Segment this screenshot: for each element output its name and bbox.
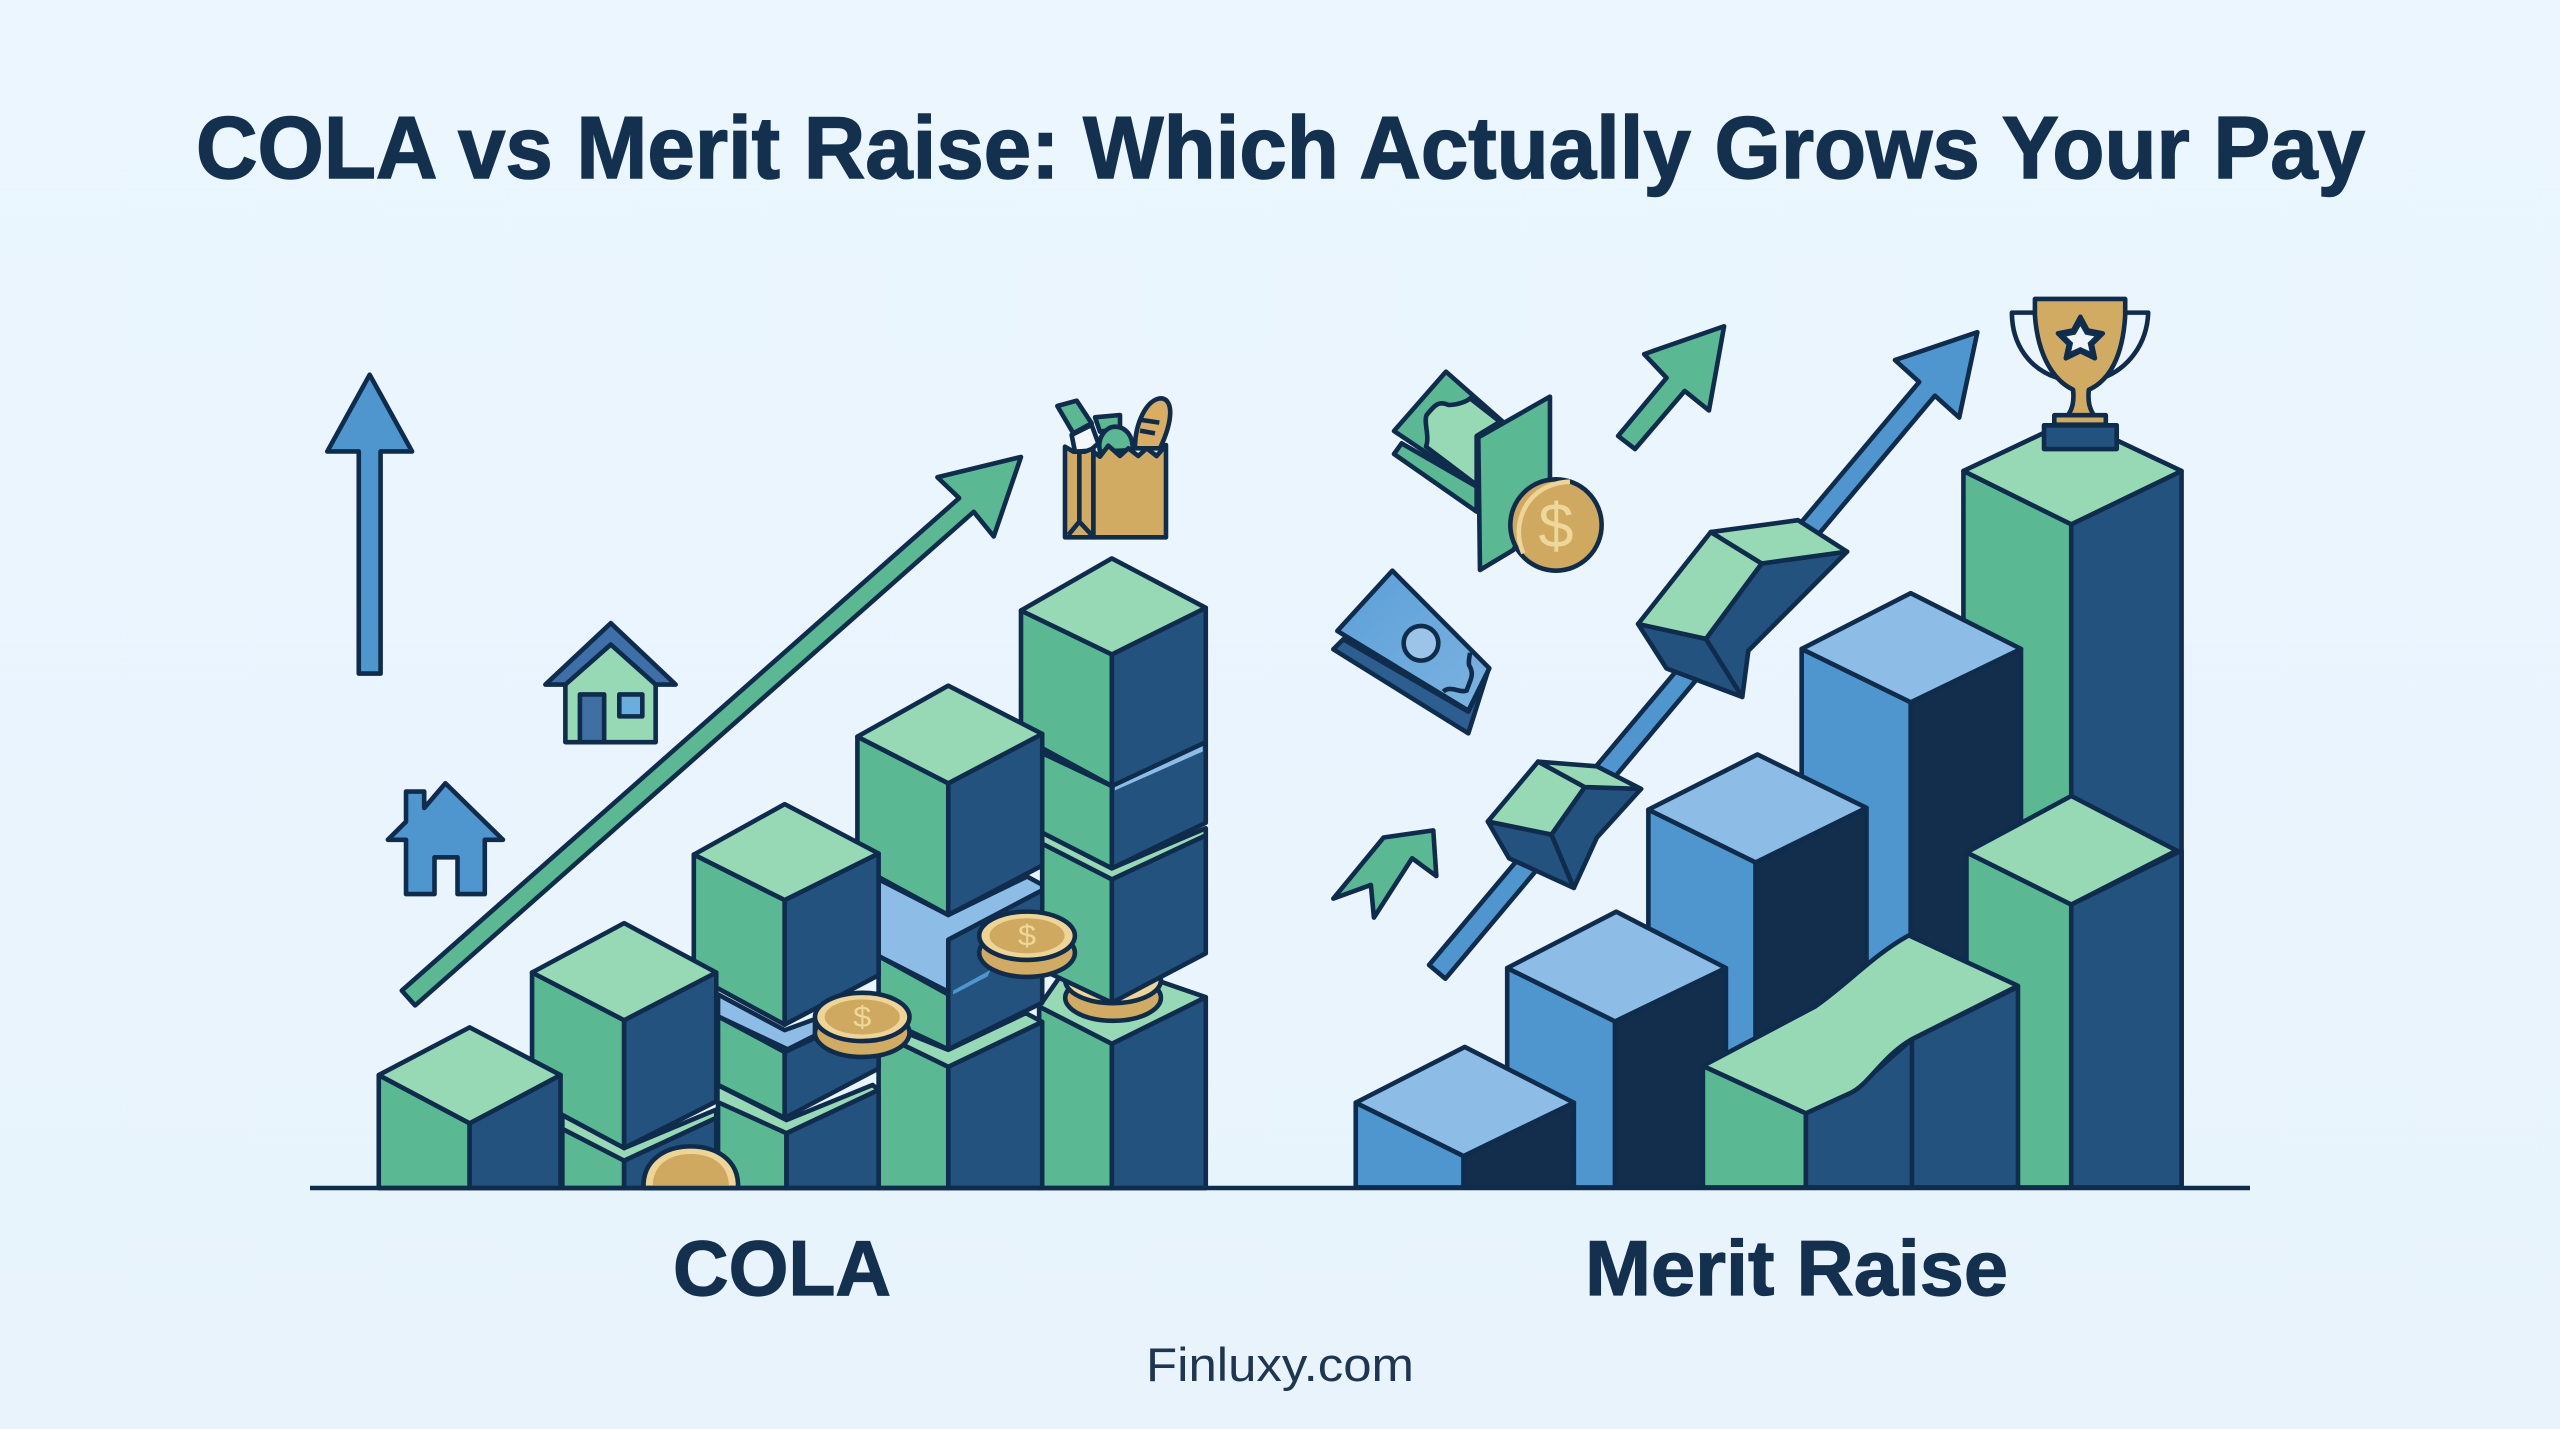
- bent cube: upper: [1638, 520, 1847, 697]
- green trend arrow: [402, 457, 1021, 1005]
- coin: bottom: [643, 1146, 738, 1188]
- icon: green banknotes and coin: $: [1538, 491, 1574, 561]
- short green column: [1966, 796, 2182, 1187]
- tall green column: [1963, 419, 2182, 1187]
- icon: grocery bag: [1057, 398, 1170, 537]
- panel: Merit Raise chart: [1333, 299, 2182, 1187]
- icon: green banknotes and coin: [1394, 372, 1602, 571]
- column 2 stack: [532, 923, 716, 1188]
- icon: trophy: [2012, 299, 2148, 449]
- label: COLA: COLA: [673, 1224, 891, 1312]
- blue column 2: [1507, 912, 1726, 1187]
- column 5 lower block and coin: [1039, 957, 1206, 1188]
- footer: Finluxy.com: Finluxy.com: [1146, 1338, 1414, 1391]
- icon: blue house: [388, 783, 503, 894]
- icon: green house: [545, 623, 676, 742]
- bent cube: lower: [1488, 762, 1641, 888]
- blue column 1: [1356, 1047, 1574, 1187]
- column 5 stacked blocks: [1021, 558, 1206, 1003]
- blue trend arrow: [1429, 332, 1977, 979]
- column 1: [379, 1027, 561, 1188]
- title: COLA vs Merit Raise: Which Actually Grows Your Pay: [196, 98, 2365, 197]
- icon: blue banknote: [1333, 571, 1489, 733]
- label: Merit Raise: Merit Raise: [1585, 1224, 2008, 1312]
- small green arrow: lower: [1333, 830, 1436, 918]
- coin: upper: $: [1018, 919, 1036, 952]
- blue column 4: [1802, 593, 2021, 1187]
- column 4 stack: [857, 686, 1042, 1188]
- coin: middle: [815, 993, 910, 1057]
- panel: COLA chart: [327, 375, 1206, 1188]
- coin: middle: $: [853, 1000, 871, 1033]
- baseline axis: [310, 1186, 2250, 1190]
- column 3 stack: [694, 804, 879, 1188]
- wavy green block: [1703, 935, 2018, 1187]
- coin: upper: [979, 912, 1075, 977]
- blue column 3: [1648, 754, 1866, 1187]
- icon: blue up arrow: [327, 375, 412, 674]
- small green arrow: top: [1618, 326, 1724, 449]
